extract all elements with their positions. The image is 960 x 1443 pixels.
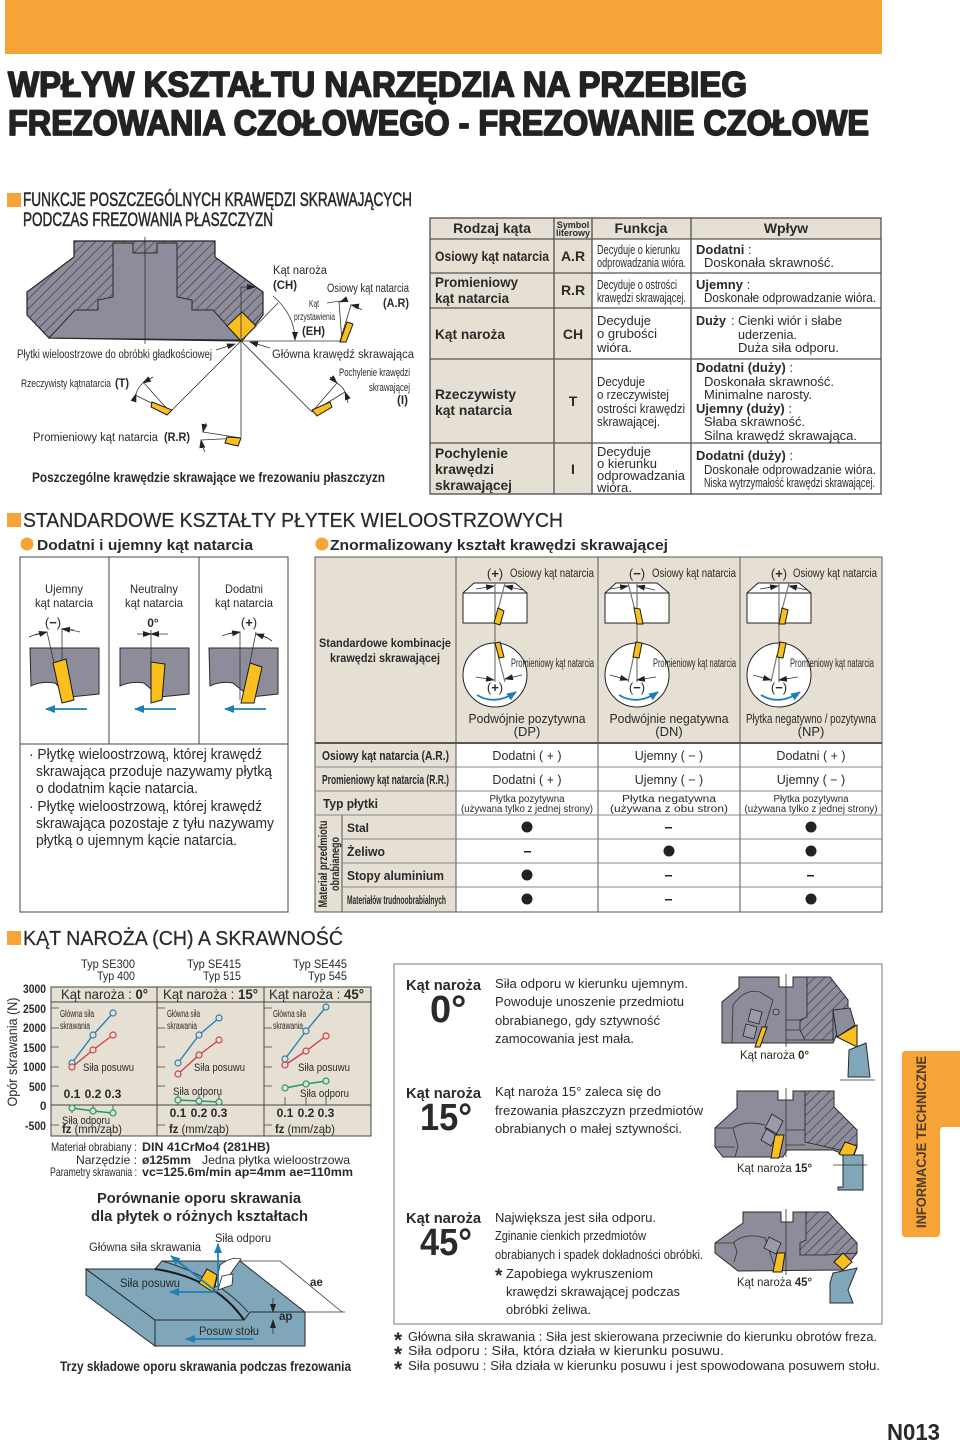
table header: literowy: [556, 228, 590, 238]
corner angle 15 series: Główna siła: [167, 1009, 200, 1020]
corner angle 45 text: 45°: [420, 1222, 472, 1264]
row: radial rake: R.R: [561, 282, 585, 298]
row: inclination: Pochylenie: [435, 445, 508, 461]
neutral rake diagram: 0°: [147, 616, 159, 630]
diagram labels: Płytki wieloostrzowe do obróbki gładkościowej: [17, 349, 212, 361]
force and dimension labels: Posuw stołu: [199, 1326, 259, 1338]
neutral rake diagram: kąt natarcia: [125, 596, 183, 610]
row labels: obrabianego: [328, 837, 342, 891]
rake explanation text: płytką o ujemnym kącie natarcia.: [36, 833, 237, 849]
insert type labels: Typ SE415: [187, 957, 241, 971]
row: true rake: Decyduje: [597, 375, 645, 389]
subheading: positive and negative rake: Dodatni i ujemny kąt natarcia: [37, 537, 254, 554]
diagram labels: Osiowy kąt natarcia: [327, 283, 409, 295]
row: corner angle: Kąt naroża: [435, 326, 505, 342]
row: corner angle: Decyduje: [597, 313, 651, 328]
corner angle 45 series: fz (mm/ząb): [275, 1122, 335, 1136]
test conditions: [50, 1140, 353, 1179]
negative positive diagram: Promieniowy kąt natarcia: [790, 658, 874, 670]
row values: rake signs and insert type: Ujemny ( − ): [777, 773, 845, 787]
negative rake diagram: Ujemny: [45, 582, 83, 596]
corner angle 45 series: 0.3: [318, 1106, 335, 1120]
corner angle 45 series: Kąt naroża : 45°: [269, 986, 364, 1002]
negative rake diagram: (−): [45, 615, 61, 630]
neutral rake diagram: [120, 582, 189, 709]
y axis: 2000: [23, 1023, 46, 1035]
corner angle 15 series: skrawania: [167, 1021, 197, 1032]
corner angle 15 text: obrabianych o małej sztywności.: [495, 1121, 682, 1136]
corner angle 45 series: 0.1: [277, 1106, 294, 1120]
row: inclination: [435, 444, 876, 495]
y axis: Opór skrawania (N): [4, 998, 20, 1106]
heading: standard insert shapes: STANDARDOWE KSZTAŁTY PŁYTEK WIELOOSTRZOWYCH: [23, 510, 563, 532]
corner angle 45 series: Siła posuwu: [298, 1062, 350, 1074]
corner angle 45 text: krawędzi skrawającej podczas: [506, 1284, 680, 1299]
corner angle 15 series: 0.2: [191, 1106, 208, 1120]
corner angle 45 series: Główna siła: [273, 1009, 306, 1020]
neutral rake diagram: Neutralny: [130, 582, 178, 596]
chart frame: [51, 987, 371, 1136]
test conditions: Jedna płytka wieloostrzowa: [202, 1153, 350, 1167]
tool illustration 0 degrees: [722, 974, 875, 1080]
material suitability marks: [522, 822, 816, 904]
tool illustration 15 degrees: Kąt naroża 15°: [737, 1163, 812, 1175]
corner angle 0 series: 0.2: [85, 1087, 102, 1101]
row: true rake: Ujemny (duży) :: [696, 401, 792, 416]
row: inclination: skrawającej: [435, 477, 512, 493]
double positive diagram: (+): [487, 680, 503, 695]
diagram labels: Pochylenie krawędzi: [339, 367, 410, 379]
test conditions: Narzędzie :: [76, 1153, 137, 1167]
corner angle 15 text: Kąt naroża 15° zaleca się do: [495, 1084, 661, 1099]
footnotes: Siła posuwu : Siła działa w kierunku posuwu i jest spowodowana posuwem stołu.: [408, 1358, 880, 1373]
title: [8, 66, 869, 143]
y axis: 2500: [23, 1004, 46, 1016]
y axis: 3000: [23, 984, 46, 996]
corner angle 15 series: Kąt naroża : 15°: [163, 986, 258, 1002]
double negative diagram: [605, 566, 736, 739]
test conditions: Parametry skrawania :: [50, 1165, 137, 1179]
diagram labels: (R.R): [164, 432, 190, 444]
row: true rake: Rzeczywisty: [435, 386, 516, 402]
side tab: technical information: [902, 1051, 960, 1237]
rake explanation text: · Płytkę wieloostrzową, której krawędź: [29, 799, 262, 815]
row: axial rake: Doskonała skrawność.: [704, 255, 834, 270]
row: true rake: T: [569, 393, 578, 409]
row: true rake: Minimalne narosty.: [704, 387, 812, 402]
row: corner angle: o grubości: [597, 326, 657, 341]
row labels: Osiowy kąt natarcia (A.R.): [322, 748, 449, 763]
diagram labels: Kąt: [309, 299, 319, 310]
double positive diagram: (+): [487, 566, 503, 581]
negative positive diagram: (+): [771, 566, 787, 581]
corner angle 15 text: frezowania płaszczyzn przedmiotów: [495, 1103, 704, 1118]
row: corner angle: :: [731, 313, 735, 328]
row: true rake: [435, 360, 857, 443]
row: axial rake: Osiowy kąt natarcia: [435, 248, 549, 264]
double positive diagram: Promieniowy kąt natarcia: [511, 658, 594, 670]
table header: Rodzaj kąta: [453, 220, 531, 236]
double positive diagram: [463, 566, 594, 739]
row: true rake: Silna krawędź skrawająca.: [704, 428, 857, 443]
insert type labels: Typ SE445: [293, 957, 347, 971]
combinations label: krawędzi skrawającej: [330, 651, 440, 665]
corner angle 0 series: [60, 986, 148, 1136]
row: radial rake: [435, 274, 876, 306]
corner angle 45 text: Kąt naroża: [406, 1211, 482, 1227]
positive rake diagram: kąt natarcia: [215, 596, 273, 610]
corner angle 15 series: 0.1: [170, 1106, 187, 1120]
rake explanation text: skrawająca przoduje nazywamy płytką: [36, 764, 273, 780]
diagram labels: [17, 265, 415, 444]
row values: rake signs and insert type: (używana z obu stron): [610, 804, 728, 815]
diagram labels: Promieniowy kąt natarcia: [33, 432, 159, 444]
row: inclination: odprowadzania: [597, 468, 686, 483]
negative positive diagram: (−): [771, 680, 787, 695]
corner angle 45 text: [406, 1210, 703, 1317]
corner angle 0 text: zamocowania jest mała.: [495, 1031, 634, 1046]
row: radial rake: Promieniowy: [435, 274, 518, 290]
subheading: standardised cutting edge shape: Znormalizowany kształt krawędzi skrawającej: [330, 537, 668, 554]
table header: [453, 220, 808, 238]
row values: rake signs and insert type: (używana tylko z jednej strony): [744, 804, 878, 815]
rake explanation text: [29, 747, 275, 849]
corner angle 15 series: Siła odporu: [173, 1086, 222, 1098]
row labels: Typ płytki: [323, 796, 378, 811]
corner angle 15 text: 15°: [420, 1097, 472, 1139]
insert type labels: Typ 400: [97, 969, 135, 983]
corner angle 0 series: Kąt naroża : 0°: [61, 986, 148, 1002]
y axis: 0: [40, 1101, 46, 1113]
force and dimension labels: Siła posuwu: [120, 1278, 180, 1290]
footnotes: *: [394, 1329, 403, 1352]
row: corner angle: Duży: [696, 313, 727, 328]
table header: Wpływ: [764, 220, 808, 236]
row values: rake signs and insert type: (używana tylko z jednej strony): [461, 804, 593, 815]
row: true rake: skrawającej.: [597, 415, 660, 429]
tool illustration 45 degrees: Kąt naroża 45°: [737, 1277, 812, 1289]
row: corner angle: wióra.: [596, 340, 632, 355]
diagram labels: Główna krawędź skrawająca: [272, 349, 415, 361]
force and dimension labels: ap: [279, 1311, 292, 1323]
corner angle 0 text: Powoduje unoszenie przedmiotu: [495, 994, 684, 1009]
double negative diagram: (−): [629, 680, 645, 695]
corner angle 45 series: [269, 986, 364, 1136]
diagram caption: Trzy składowe oporu skrawania podczas frezowania: [60, 1358, 351, 1374]
row: corner angle: [435, 313, 842, 355]
corner angle 0 text: 0°: [430, 989, 466, 1031]
corner angle 15 text: Kąt naroża: [406, 1086, 482, 1102]
rake explanation text: skrawająca pozostaje z tyłu nazywamy: [36, 816, 275, 832]
row: corner angle: CH: [563, 326, 583, 342]
double positive diagram: (DP): [514, 724, 540, 739]
row values: rake signs and insert type: [461, 749, 878, 815]
force and dimension labels: ae: [310, 1277, 323, 1289]
row: corner angle: Duża siła odporu.: [738, 340, 839, 355]
row: axial rake: A.R: [561, 248, 585, 264]
negative positive diagram: [746, 566, 877, 739]
diagram labels: skrawającej: [369, 382, 410, 394]
row: true rake: Doskonała skrawność.: [704, 374, 834, 389]
test conditions: DIN 41CrMo4 (281HB): [142, 1140, 270, 1154]
row labels: Promieniowy kąt natarcia (R.R.): [322, 772, 449, 787]
row: inclination: I: [571, 461, 575, 477]
panel: rake angle comparison: [20, 557, 288, 912]
double negative diagram: (DN): [655, 724, 683, 739]
diagram labels: (CH): [273, 280, 297, 292]
row: radial rake: Decyduje o ostrości: [597, 278, 677, 292]
row: true rake: Słaba skrawność.: [704, 414, 805, 429]
corner angle 45 text: Największa jest siła odporu.: [495, 1210, 656, 1225]
footnotes: Siła odporu : Siła, która działa w kierunku posuwu.: [408, 1343, 724, 1358]
row labels: Materiał przedmiotu: [316, 820, 330, 908]
force and dimension labels: [89, 1233, 323, 1338]
y axis: [4, 984, 46, 1133]
tool illustration 45 degrees: [715, 1209, 857, 1303]
negative positive diagram: Płytka negatywno / pozytywna: [746, 712, 876, 726]
double negative diagram: Osiowy kąt natarcia: [652, 568, 736, 580]
corner angle 15 series: Siła posuwu: [194, 1062, 245, 1074]
corner angle 0 text: Siła odporu w kierunku ujemnym.: [495, 976, 688, 991]
row: true rake: o rzeczywistej: [597, 388, 669, 402]
main insert: [227, 312, 256, 341]
footnotes: Główna siła skrawania : Siła jest skierowana przeciwnie do kierunku obrotów freza.: [408, 1329, 877, 1344]
workpiece block: [86, 1261, 305, 1346]
corner angle 45 text: Zapobiega wykruszeniom: [506, 1266, 653, 1281]
double negative diagram: (−): [629, 566, 645, 581]
row: inclination: krawędzi: [435, 461, 494, 477]
corner angle 0 series: 0.1: [64, 1087, 81, 1101]
corner angle 45 text: *: [495, 1266, 503, 1287]
title: WPŁYW KSZTAŁTU NARZĘDZIA NA PRZEBIEG: [8, 66, 747, 104]
row: radial rake: Doskonałe odprowadzanie wióra.: [704, 290, 876, 305]
insert type labels: Typ SE300: [81, 957, 135, 971]
heading: cutting resistance comparison: dla płytek o różnych kształtach: [91, 1208, 308, 1225]
row: true rake: kąt natarcia: [435, 402, 512, 418]
corner angle 0 text: [406, 976, 688, 1046]
corner angle 15 series: [163, 986, 258, 1136]
tool illustration 15 degrees: [715, 1088, 867, 1190]
positive rake diagram: [209, 582, 278, 709]
insert type labels: [81, 957, 347, 983]
corner angle 45 series: skrawania: [273, 1021, 303, 1032]
diagram labels: Kąt naroża: [273, 265, 328, 277]
row labels: Materiałów trudnoobrabialnych: [347, 893, 446, 907]
row: inclination: wióra.: [596, 480, 632, 495]
heading: cutting resistance comparison: [91, 1190, 308, 1225]
row: true rake: Dodatni (duży) :: [696, 360, 793, 375]
double positive diagram: Osiowy kąt natarcia: [510, 568, 594, 580]
table backgrounds and grid: [430, 218, 881, 494]
footnotes: *: [394, 1343, 403, 1366]
chips and insert: [199, 1258, 241, 1292]
double positive diagram: Podwójnie pozytywna: [468, 711, 586, 726]
row: radial rake: kąt natarcia: [435, 290, 509, 306]
diagram labels: (A.R): [383, 298, 409, 310]
side tab: technical information: INFORMACJE TECHNICZNE: [913, 1056, 929, 1228]
top orange banner: [5, 0, 882, 54]
diagram labels: Rzeczywisty kątnatarcia: [21, 378, 112, 390]
row labels: Żeliwo: [347, 844, 385, 859]
combinations label: [319, 636, 451, 665]
corner angle 0 series: Siła posuwu: [83, 1062, 134, 1074]
corner angle 45 text: Zginanie cienkich przedmiotów: [495, 1228, 647, 1243]
corner angle 0 series: Główna siła: [60, 1009, 94, 1020]
row labels: Stopy aluminium: [347, 868, 444, 883]
negative positive diagram: Osiowy kąt natarcia: [793, 568, 877, 580]
corner angle 0 text: Kąt naroża: [406, 978, 482, 994]
force and dimension labels: Siła odporu: [215, 1233, 271, 1245]
rake explanation text: o dodatnim kącie natarcia.: [36, 781, 198, 797]
double negative diagram: Podwójnie negatywna: [610, 711, 729, 726]
row values: rake signs and insert type: Ujemny ( − ): [635, 773, 703, 787]
corner angle 0 series: 0.3: [105, 1087, 122, 1101]
heading: corner angle and cutting performance: KĄT NAROŻA (CH) A SKRAWNOŚĆ: [23, 926, 343, 950]
row: corner angle: uderzenia.: [738, 327, 797, 342]
corner angle 15 text: [406, 1084, 704, 1139]
corner angle 0 series: Siła odporu: [62, 1115, 110, 1127]
corner angle 45 series: 0.2: [298, 1106, 315, 1120]
y axis: -500: [25, 1121, 46, 1133]
diagram labels: przystawienia: [294, 312, 335, 323]
corner angle 45 text: obróbki żeliwa.: [506, 1302, 591, 1317]
row labels: [316, 748, 449, 908]
corner angle 15 series: 0.3: [211, 1106, 228, 1120]
row values: rake signs and insert type: Dodatni ( + ): [492, 749, 562, 763]
combination table grid: [315, 557, 882, 912]
row values: rake signs and insert type: Dodatni ( + ): [492, 773, 562, 787]
heading: cutting edge functions: [7, 189, 412, 231]
row: inclination: Doskonałe odprowadzanie wióra.: [704, 462, 876, 477]
test conditions: Materiał obrabiany :: [51, 1140, 137, 1154]
footnotes: [394, 1329, 880, 1381]
insert type labels: Typ 515: [203, 969, 241, 983]
row: true rake: ostrości krawędzi: [597, 402, 685, 416]
test conditions: vc=125.6m/min ap=4mm ae=110mm: [142, 1165, 353, 1179]
footnotes: *: [394, 1358, 403, 1381]
combinations label: Standardowe kombinacje: [319, 636, 451, 650]
row values: rake signs and insert type: Dodatni ( + ): [776, 749, 846, 763]
panel: corner angle descriptions: [394, 964, 882, 1324]
row: axial rake: [435, 242, 834, 270]
cutter body: [27, 237, 263, 344]
angle construction lines: [134, 287, 362, 452]
title: FREZOWANIA CZOŁOWEGO - FREZOWANIE CZOŁOWE: [8, 104, 869, 143]
table header: Symbol: [557, 220, 589, 230]
row: radial rake: Ujemny :: [696, 277, 750, 292]
row: radial rake: krawędzi skrawającej.: [597, 291, 686, 305]
small inserts: [151, 322, 353, 446]
y axis: 1000: [23, 1062, 46, 1074]
corner angle 0 series: skrawania: [60, 1021, 90, 1032]
row: inclination: Niska wytrzymałość krawędzi skrawającej.: [704, 475, 875, 490]
diagram: face mill cross-section with cutting edge angles: [17, 237, 415, 485]
force arrows: [170, 1244, 253, 1339]
heading: cutting resistance comparison: Porównanie oporu skrawania: [97, 1190, 302, 1207]
chart: cutting resistance: [4, 957, 371, 1136]
corner angle 45 text: obrabianych i spadek dokładności obróbki.: [495, 1247, 703, 1262]
diagram labels: (EH): [302, 326, 325, 338]
negative rake diagram: kąt natarcia: [35, 596, 93, 610]
row: inclination: o kierunku: [597, 456, 657, 471]
row: inclination: Dodatni (duży) :: [696, 448, 793, 463]
test conditions: ø125mm: [142, 1153, 191, 1167]
row: axial rake: odprowadzania wióra.: [597, 256, 686, 270]
row: axial rake: Dodatni :: [696, 242, 752, 257]
double negative diagram: Promieniowy kąt natarcia: [653, 658, 736, 670]
row: axial rake: Decyduje o kierunku: [597, 243, 680, 257]
row values: rake signs and insert type: Ujemny ( − ): [635, 749, 703, 763]
positive rake diagram: (+): [241, 615, 257, 630]
table: angle types, function and effect: [430, 218, 881, 495]
diagram labels: (I): [397, 395, 408, 407]
corner angle 0 text: obrabianego, gdy sztywność: [495, 1013, 660, 1028]
diagram labels: (T): [115, 378, 129, 390]
row values: rake signs and insert type: Płytka pozytywna: [774, 794, 849, 805]
table header: Funkcja: [615, 220, 668, 236]
force and dimension labels: Główna siła skrawania: [89, 1242, 202, 1254]
dimension lines: [240, 1261, 345, 1334]
insert type labels: Typ 545: [308, 969, 347, 983]
y axis: 500: [29, 1082, 46, 1094]
rake explanation text: · Płytkę wieloostrzową, której krawędź: [29, 747, 262, 763]
heading: cutting edge functions: FUNKCJE POSZCZEGÓLNYCH KRAWĘDZI SKRAWAJĄCYCH: [23, 189, 412, 211]
corner angle 15 series: fz (mm/ząb): [169, 1122, 229, 1136]
corner angle 45 series: Siła odporu: [300, 1088, 349, 1100]
row labels: Stal: [347, 821, 369, 835]
negative positive diagram: (NP): [798, 724, 824, 739]
diagram caption: Poszczególne krawędzie skrawające we frezowaniu płaszczyzn: [32, 469, 385, 485]
heading: cutting edge functions: PODCZAS FREZOWANIA PŁASZCZYZN: [23, 210, 273, 231]
tool illustration 0 degrees: Kąt naroża 0°: [740, 1050, 809, 1062]
row values: rake signs and insert type: Płytka negatywna: [622, 794, 717, 805]
y axis: 1500: [23, 1043, 46, 1055]
diagram: three cutting force components: [60, 1233, 351, 1374]
corner angle 0 series: fz (mm/ząb): [62, 1122, 122, 1136]
row: inclination: Decyduje: [597, 444, 651, 459]
row values: rake signs and insert type: Płytka pozytywna: [490, 794, 565, 805]
negative rake diagram: [29, 582, 99, 709]
row: corner angle: Cienki wiór i słabe: [738, 313, 842, 328]
positive rake diagram: Dodatni: [225, 582, 263, 596]
panel: standard cutting edge combinations: [315, 557, 882, 912]
